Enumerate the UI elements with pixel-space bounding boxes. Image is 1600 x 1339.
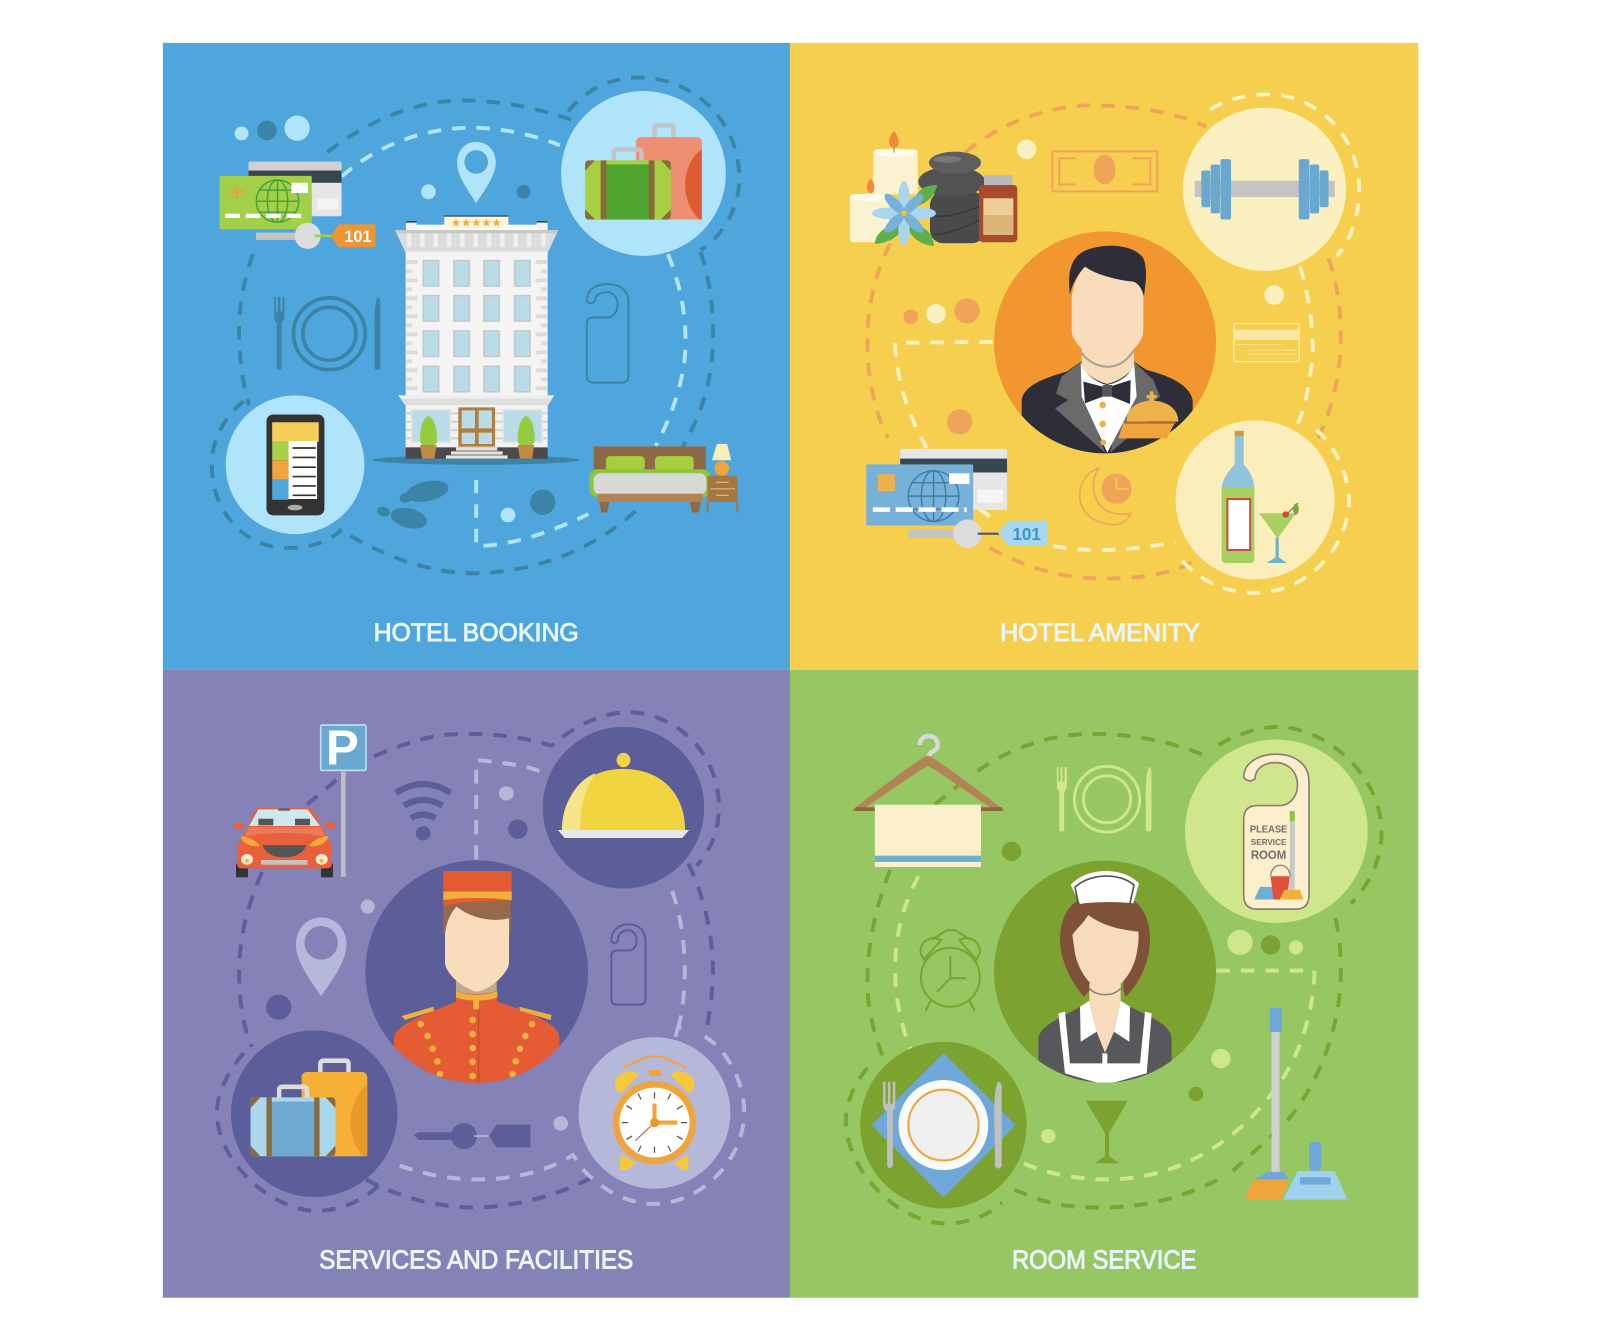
panel: hotel amenity xyxy=(790,43,1418,670)
icon: card outline xyxy=(1234,324,1299,362)
panel: hotel booking xyxy=(163,43,790,670)
icon: hotel building xyxy=(372,215,580,465)
icon: spa candles stones flower and bottle xyxy=(850,131,1017,246)
decorative dots xyxy=(1002,842,1303,1143)
icon: luggage in circle xyxy=(231,1030,397,1197)
housekeeper portrait xyxy=(994,861,1216,1085)
concierge portrait xyxy=(994,231,1216,455)
icon: dumbbell in circle xyxy=(1183,108,1346,271)
icon: green credit cards and key xyxy=(220,162,375,249)
icon: key with tag xyxy=(414,1123,530,1149)
icon: alarm clock in circle xyxy=(579,1037,730,1189)
title: hotel amenity: HOTEL AMENITY xyxy=(1000,619,1200,647)
icon: footprints xyxy=(376,477,450,532)
icon: moon and clock xyxy=(1080,468,1131,525)
icon: banknote outline xyxy=(1052,151,1157,191)
icon: bed with nightstand xyxy=(589,444,737,512)
panel: services and facilities xyxy=(163,670,790,1298)
icon: place setting in circle xyxy=(860,1042,1027,1208)
icon: door hanger in circle xyxy=(1185,739,1368,923)
icon: blue credit cards and key xyxy=(866,449,1047,548)
bellhop portrait xyxy=(365,860,588,1084)
icon: parking sign: P xyxy=(326,720,359,775)
icon: blue credit cards and key: 101 xyxy=(1012,524,1041,544)
icon: door hanger in circle: PLEASE xyxy=(1250,824,1287,836)
icon: cloche in circle xyxy=(543,727,704,888)
icon: hotel building: ★★★★★ xyxy=(451,216,502,230)
panel background purple xyxy=(163,670,790,1298)
icon: plate and cutlery outline xyxy=(274,297,380,370)
title: hotel booking: HOTEL BOOKING xyxy=(374,619,579,647)
icon: door hanger in circle: SERVICE xyxy=(1251,837,1287,847)
icon: bottle and cocktail in circle xyxy=(1176,420,1335,579)
icon: door hanger outline xyxy=(611,924,646,1005)
dashed paths xyxy=(212,78,739,573)
icon: martini glass xyxy=(1086,1101,1128,1163)
icon: parking sign xyxy=(321,720,366,877)
panel background yellow xyxy=(790,43,1418,670)
icon: plate and cutlery light xyxy=(1057,766,1151,832)
icon: mop and dustpan xyxy=(1245,1008,1347,1200)
icon: red car xyxy=(234,807,336,877)
decorative dots xyxy=(266,786,568,1131)
icon: green credit cards and key: 101 xyxy=(344,228,371,246)
icon: door hanger in circle: ROOM xyxy=(1251,849,1286,862)
icon: reception bell xyxy=(1118,391,1178,438)
dashed paths xyxy=(217,712,744,1211)
decorative dots xyxy=(903,140,1284,435)
panel: room service xyxy=(790,670,1418,1298)
icon: alarm clock outline xyxy=(921,930,980,1011)
icon: pin xyxy=(296,918,346,996)
icon: map pin xyxy=(457,142,496,203)
dashed paths xyxy=(867,94,1359,593)
icon: smartphone in circle xyxy=(226,395,364,534)
panel background blue xyxy=(163,43,790,670)
icon: hanger with towel xyxy=(851,736,1005,867)
panel background green xyxy=(790,670,1418,1298)
title: room service: ROOM SERVICE xyxy=(1012,1246,1196,1275)
title: services and facilities: SERVICES AND FACILITIES xyxy=(319,1246,633,1275)
icon: wifi xyxy=(396,784,450,841)
dashed paths xyxy=(846,727,1382,1224)
icon: suitcases in circle xyxy=(561,91,726,256)
icon: door hanger outline xyxy=(587,284,628,383)
decorative dots xyxy=(235,115,555,522)
